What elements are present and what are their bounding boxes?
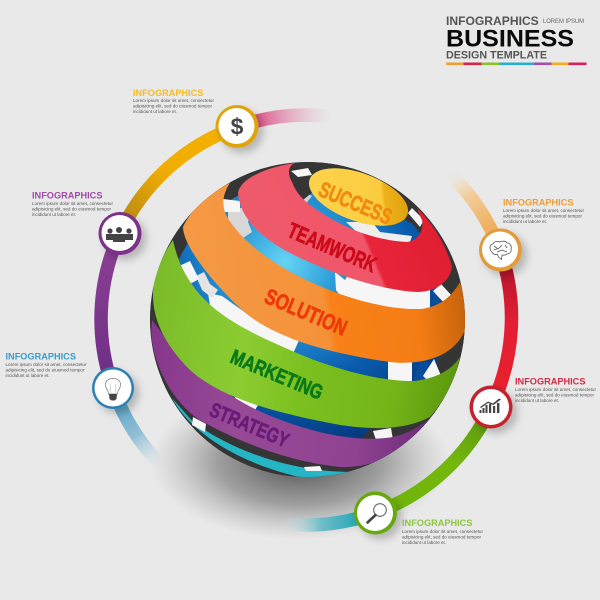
text block: yellow: adipisicing elit, sed do eiusmod tempor	[133, 104, 212, 110]
node: magnifier	[354, 492, 397, 534]
label: success: SUCCESS	[315, 177, 396, 229]
lower dark band	[162, 380, 415, 477]
text block: blue: adipisicing elit, sed do eiusmod tempor	[6, 368, 85, 374]
text block: red: incididunt ut labore et.	[515, 398, 559, 404]
label: strategy: STRATEGY	[206, 398, 293, 453]
band: red teamwork	[238, 163, 452, 292]
node: people	[98, 212, 142, 255]
icon: bar chart	[480, 398, 501, 413]
node: bulb	[92, 367, 134, 409]
text block: green	[402, 518, 483, 546]
text block: yellow: INFOGRAPHICS	[133, 88, 203, 98]
text block: orange: Lorem ipsum dolor sit amet, consectetur	[503, 208, 584, 214]
right side dark wedges	[358, 262, 468, 442]
white stripes on dark bands	[163, 168, 453, 471]
globe rim dark band	[158, 170, 458, 470]
header: title block: BUSINESS	[446, 26, 574, 52]
text block: yellow	[133, 88, 214, 115]
label: teamwork: TEAMWORK	[284, 218, 380, 277]
globe ocean	[150, 162, 465, 477]
text block: orange: INFOGRAPHICS	[503, 198, 573, 208]
text block: green: INFOGRAPHICS	[402, 518, 472, 528]
icon: light bulb	[106, 378, 120, 400]
text block: green: Lorem ipsum dolor sit amet, consectetur	[402, 529, 483, 535]
text block: red: Lorem ipsum dolor sit amet, consectetur	[515, 387, 596, 393]
header: title block: LOREM IPSUM	[543, 18, 584, 25]
icon: magnifier	[368, 504, 386, 522]
node: brain	[479, 228, 522, 272]
text block: yellow: Lorem ipsum dolor sit amet, consectetur	[133, 98, 214, 104]
text block: blue: INFOGRAPHICS	[6, 352, 76, 362]
ring: circular timeline arcs	[101, 115, 511, 525]
text block: blue	[6, 352, 87, 379]
icon: dollar sign: $	[231, 114, 244, 140]
text block: red	[515, 376, 596, 404]
cap: yellow ellipse	[308, 168, 408, 226]
text block: purple: INFOGRAPHICS	[32, 190, 102, 200]
band: purple strategy	[151, 320, 428, 467]
text block: purple: incididunt ut labore et.	[32, 212, 76, 218]
header: title block: DESIGN TEMPLATE	[446, 50, 547, 62]
node: dollar	[216, 105, 258, 148]
text block: green: incididunt ut labore et.	[402, 540, 446, 546]
globe	[150, 157, 468, 490]
text block: green: adipisicing elit, sed do eiusmod tempor	[402, 534, 481, 540]
text block: red: adipisicing elit, sed do eiusmod tempor	[515, 392, 594, 398]
text block: orange: incididunt ut labore et.	[503, 219, 547, 225]
text block: blue: incididunt ut labore et.	[6, 373, 50, 379]
label: marketing: MARKETING	[227, 345, 326, 404]
text block: blue: Lorem ipsum dolor sit amet, consectetur	[6, 362, 87, 368]
band: green marketing	[153, 240, 460, 428]
text block: purple	[32, 190, 113, 218]
header: title block: INFOGRAPHICS	[446, 14, 539, 28]
text block: purple: adipisicing elit, sed do eiusmod tempor	[32, 206, 111, 212]
icon: brain	[490, 241, 511, 260]
ground shadow under globe	[150, 384, 450, 540]
text block: red: INFOGRAPHICS	[515, 376, 585, 386]
label: solution: SOLUTION	[261, 284, 351, 341]
top opening dark ring	[288, 162, 426, 226]
text block: yellow: incididunt ut labore et.	[133, 109, 177, 115]
text block: orange: adipisicing elit, sed do eiusmod tempor	[503, 214, 582, 220]
node: chart	[470, 386, 512, 428]
text block: purple: Lorem ipsum dolor sit amet, consectetur	[32, 201, 113, 207]
header: title block	[446, 14, 586, 65]
band: orange solution	[183, 183, 465, 363]
globe continents	[196, 190, 430, 412]
blue slivers on right	[412, 288, 442, 384]
text block: orange	[503, 198, 584, 225]
teal cap	[172, 398, 352, 480]
icon: people	[106, 227, 133, 242]
